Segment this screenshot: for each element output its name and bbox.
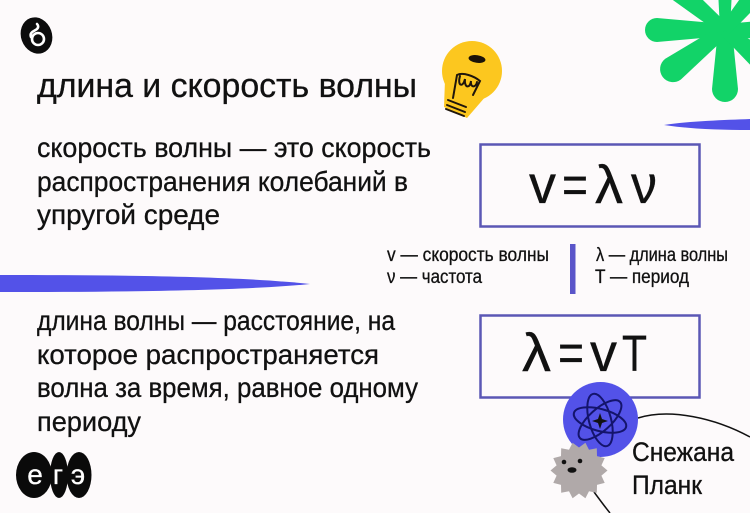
ege badge: е (27, 459, 43, 490)
author name: Снежана (632, 437, 735, 467)
legend divider (570, 244, 576, 294)
icon: grey fuzzy character (550, 443, 608, 498)
legend: right column (595, 245, 728, 288)
formula box: lambda = v T (480, 316, 700, 398)
text block: wavelength definition (37, 305, 418, 437)
ege badge: г (53, 459, 63, 490)
legend: left column (387, 245, 549, 288)
curved line around name (594, 414, 750, 513)
title: длина и скорость волны (37, 67, 417, 105)
formula box: v = lambda nu: v (529, 155, 556, 215)
formula box: lambda = v T: v (590, 323, 617, 383)
formula box: lambda = v T: = (558, 323, 584, 383)
brush stroke: top right (664, 119, 750, 130)
text block: wavelength definition: периоду (37, 406, 141, 437)
legend: right column: T — период (595, 267, 689, 288)
text block: wave speed definition (37, 132, 431, 230)
formula box: v = lambda nu: = (562, 155, 588, 215)
text block: wave speed definition: упругой среде (37, 199, 220, 230)
text block: wave speed definition: скорость волны — это скорость (37, 132, 431, 163)
text block: wavelength definition: длина волны — расстояние, на (37, 305, 395, 336)
legend: left column: ν — частота (387, 267, 482, 288)
ege badge: э (71, 459, 85, 490)
text block: wavelength definition: волна за время, равное одному (37, 372, 418, 403)
text block: wavelength definition: которое распространяется (37, 339, 379, 370)
formula box: v = lambda nu: λ (595, 155, 623, 215)
icon: green asterisk (645, 0, 750, 102)
legend: left column: v — скорость волны (387, 245, 549, 266)
author name (632, 437, 735, 500)
formula box: v = lambda nu: ν (631, 155, 657, 215)
icon: light bulb (442, 41, 502, 118)
brush stroke: left (0, 275, 310, 292)
icon: blue atom circle (563, 382, 638, 457)
formula box: lambda = v T: T (622, 325, 647, 382)
formula box: lambda = v T: λ (522, 323, 551, 383)
author name: Планк (632, 470, 702, 500)
formula box: v = lambda nu (480, 144, 700, 226)
legend: right column: λ — длина волны (596, 245, 728, 266)
logo badge (16, 13, 57, 58)
ege badge (16, 452, 92, 498)
text block: wave speed definition: распространения колебаний в (37, 166, 408, 197)
